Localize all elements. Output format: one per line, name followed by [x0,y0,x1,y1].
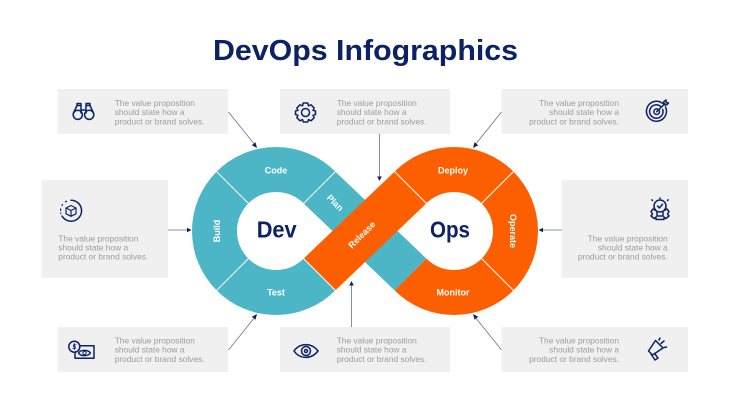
text block: The value proposition [115,336,195,346]
label: Build: Build [212,220,222,242]
icon: binoculars [73,104,94,119]
text block: should state how a [115,107,185,117]
text block: product or brand solves. [529,116,619,126]
segment: Build [192,172,248,290]
segment: Release [304,172,426,290]
label: Plan: Plan [325,193,345,213]
panel: bottom left money [58,327,228,372]
infinity loop diagram [192,147,538,315]
segment: Test [217,259,335,315]
panel: bottom center eye [280,327,450,372]
text block: product or brand solves. [337,116,427,126]
segment: Code [217,147,335,203]
text block: product or brand solves. [58,252,148,262]
text block: should state how a [337,107,407,117]
text block: product or brand solves. [337,354,427,364]
title: DevOps Infographics [213,35,518,67]
label: Test: Test [267,288,285,298]
text block: The value proposition [539,336,619,346]
arrow: top left to Code [228,112,257,148]
panel: top left binoculars [58,89,228,134]
icon: gear [296,103,316,122]
text block: The value proposition [115,98,195,108]
text block: should state how a [549,345,619,355]
segment: Monitor [395,259,513,315]
panel: bottom right megaphone [502,327,688,372]
arrow: bottom left to Test [228,314,257,350]
icon: target [646,100,668,121]
text block: The value proposition [588,233,668,243]
text block: The value proposition [58,233,139,243]
segment: Plan connector band [304,172,426,290]
panel: middle right bulb [562,180,688,278]
panel: middle left box [42,180,168,278]
text block: should state how a [337,345,407,355]
panel: top center gear [280,89,450,134]
icon: money [69,341,94,358]
label: Deploy: Deploy [438,166,468,176]
arrow: top center to Release [377,134,382,181]
text block: product or brand solves. [115,116,205,126]
text block: The value proposition [539,98,619,108]
label: Dev: Dev [257,216,297,242]
arrow: middle right to Operate [538,228,562,232]
arrow: middle left to Build [168,228,192,232]
text block: product or brand solves. [115,354,205,364]
label: Ops: Ops [430,216,470,242]
icon: cycle box [61,200,82,221]
icon: eye [294,345,318,357]
arrow: top right to Deploy [473,112,502,148]
icon: bulb and gear [651,198,669,220]
panel: top right target [502,89,688,134]
text block: product or brand solves. [578,252,668,262]
text block: The value proposition [337,336,417,346]
text block: should state how a [58,242,128,252]
label: Monitor: Monitor [436,288,470,298]
label: Code: Code [265,166,287,176]
label: Release: Release [346,219,377,250]
text block: should state how a [549,107,619,117]
text block: The value proposition [337,98,417,108]
arrow: bottom right to Monitor [473,314,502,350]
text block: should state how a [598,242,668,252]
icon: megaphone [648,338,666,360]
text block: product or brand solves. [529,354,619,364]
label: Operate: Operate [508,214,518,248]
segment: Operate [482,172,538,290]
text block: should state how a [115,345,185,355]
arrow: bottom center to Release [349,281,354,327]
segment: Deploy [395,147,513,203]
